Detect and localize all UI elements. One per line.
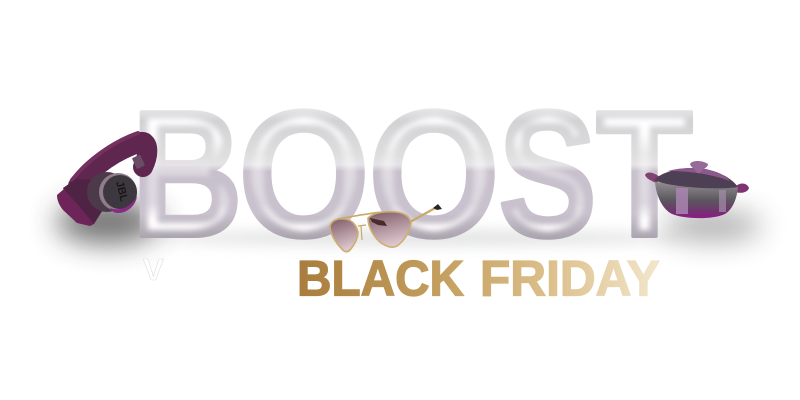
- icon: casserole pot: [645, 161, 749, 218]
- heading: BLACK FRIDAY: [297, 250, 660, 306]
- icon: headphones: [57, 133, 147, 226]
- title: BOOST: S: [498, 74, 597, 275]
- title: BOOST: [140, 108, 693, 240]
- title: BOOST: O: [238, 74, 370, 275]
- icon: sunglasses: [330, 204, 442, 252]
- title: BOOST: O: [238, 74, 370, 275]
- shadow: ground: [56, 200, 762, 245]
- title: BOOST: B: [131, 74, 243, 275]
- heading: BLACK FRIDAY: BLACK: [297, 250, 464, 306]
- heading: BLACK FRIDAY: FRIDAY: [480, 250, 660, 306]
- title: BOOST: T: [596, 74, 693, 275]
- title: BOOST: O: [368, 74, 500, 275]
- title: BOOST: B: [131, 74, 243, 275]
- subheading: faint V: V: [143, 252, 164, 287]
- title: BOOST: S: [498, 74, 597, 275]
- icon: headphones: JBL: [113, 180, 130, 203]
- title: BOOST: O: [368, 74, 500, 275]
- title: BOOST: T: [596, 74, 693, 275]
